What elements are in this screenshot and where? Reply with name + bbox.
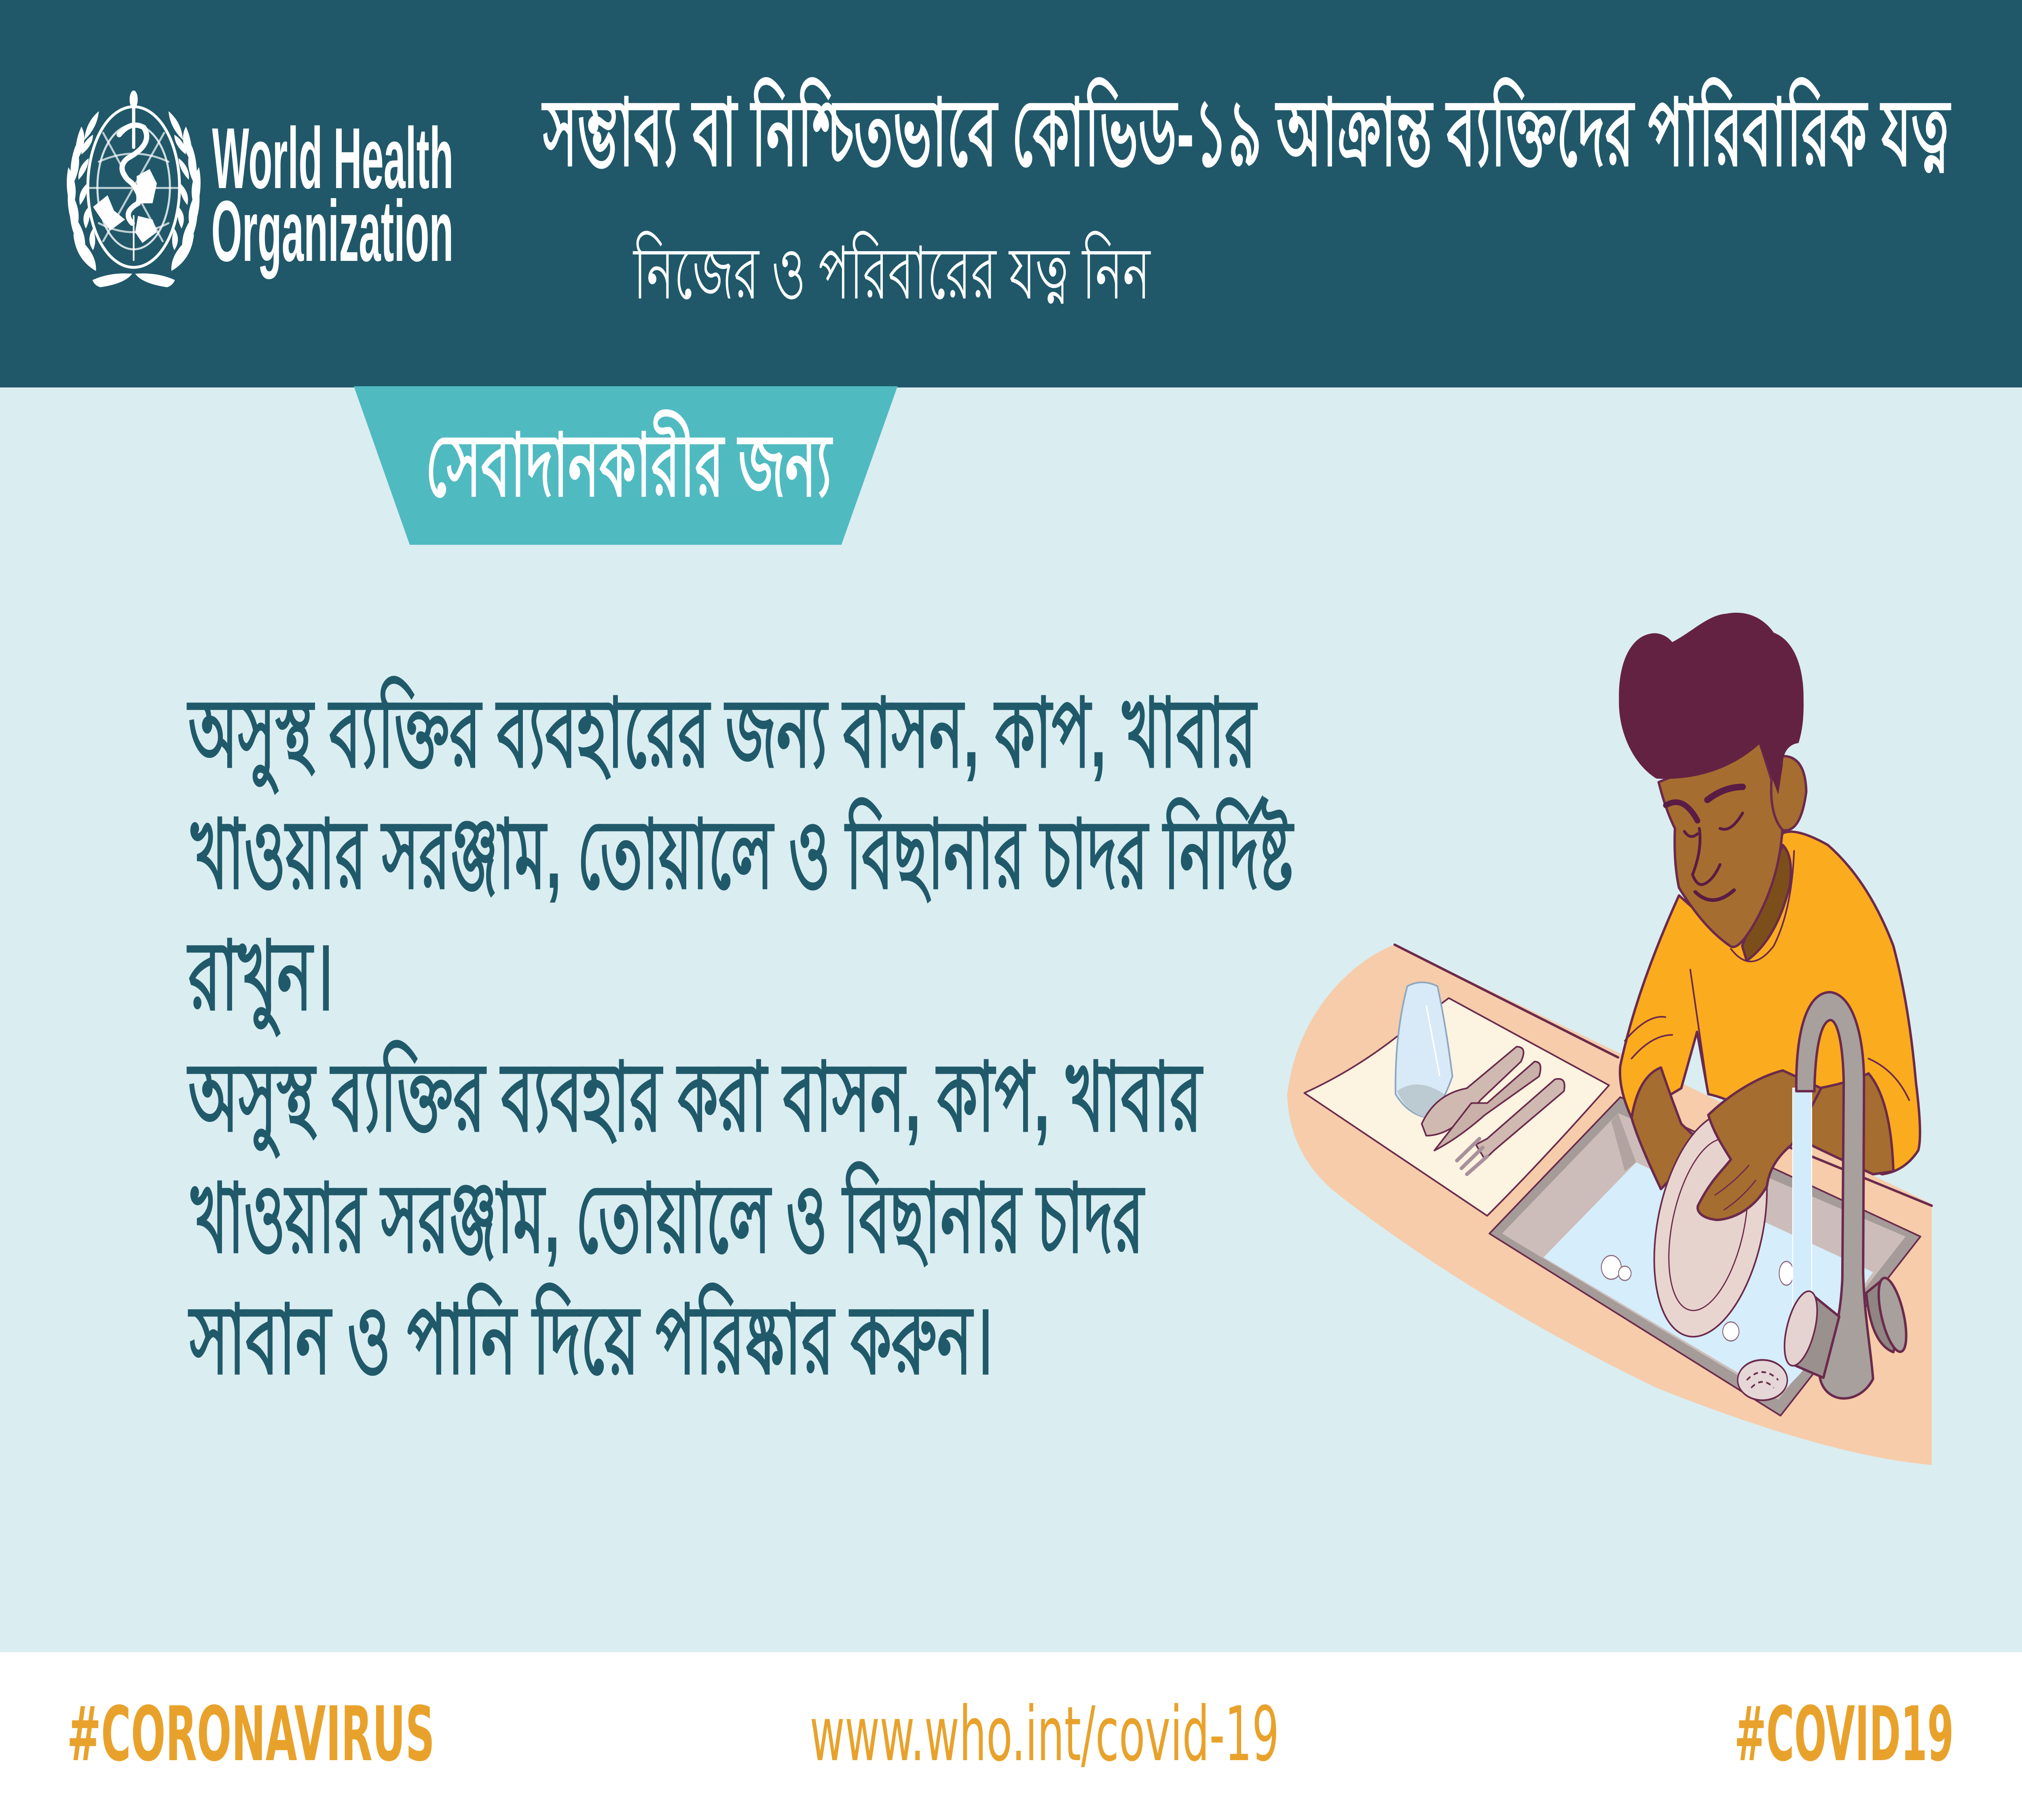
staff and serpent	[119, 91, 147, 260]
globe rings	[88, 107, 180, 267]
far arm	[1792, 1073, 1893, 1174]
suds	[1601, 1255, 1794, 1341]
cutlery	[1422, 1047, 1565, 1174]
sink	[1489, 1097, 1920, 1416]
mat	[1304, 998, 1609, 1216]
text block: guidance: খাওয়ার সরঞ্জাম, তোয়ালে ও বিছানার চাদর নির্দিষ্ট	[190, 795, 1294, 908]
water stream	[1793, 1088, 1812, 1308]
glass	[1396, 982, 1453, 1118]
counter	[1287, 945, 1932, 1465]
neck	[1742, 845, 1791, 961]
subtitle: নিজের ও পরিবারের যত্ন নিন	[633, 231, 1151, 314]
facial features	[1666, 787, 1743, 900]
text block: guidance: সাবান ও পানি দিয়ে পরিষ্কার করুন।	[188, 1282, 993, 1393]
website url: www.who.int/covid-19	[810, 1690, 1279, 1778]
banner: for caregivers	[354, 386, 897, 545]
hand holding plate	[1698, 1071, 1821, 1220]
text block: guidance: রাখুন।	[186, 922, 334, 1038]
plate	[1634, 1094, 1787, 1356]
ear and face	[1659, 741, 1783, 947]
illustration: person washing dishes	[1287, 613, 1932, 1465]
faucet	[1778, 992, 1912, 1399]
hair	[1619, 613, 1804, 795]
hashtag right: #COVID19	[1734, 1690, 1954, 1778]
sweater	[1620, 832, 1920, 1174]
panel: footer	[0, 1652, 2022, 1820]
text block: guidance: খাওয়ার সরঞ্জাম, তোয়ালে ও বিছানার চাদর	[190, 1161, 1146, 1272]
banner: for caregivers: সেবাদানকারীর জন্য	[425, 410, 833, 514]
panel: header band	[0, 0, 2022, 387]
text block: guidance: অসুস্থ ব্যক্তির ব্যবহারের জন্য বাসন, কাপ, খাবার	[186, 675, 1258, 796]
logotype: Organization	[212, 182, 453, 279]
logotype: World Health	[212, 110, 453, 207]
text block: guidance	[186, 675, 1294, 1393]
drain	[1738, 1360, 1787, 1400]
text block: guidance: অসুস্থ ব্যক্তির ব্যবহার করা বাসন, কাপ, খাবার	[186, 1039, 1203, 1160]
icon: WHO emblem	[67, 91, 201, 287]
hashtag left: #CORONAVIRUS	[67, 1690, 435, 1778]
sleeve cuff lines	[1625, 969, 1909, 1100]
near arm	[1632, 1067, 1697, 1189]
logotype	[212, 110, 453, 279]
